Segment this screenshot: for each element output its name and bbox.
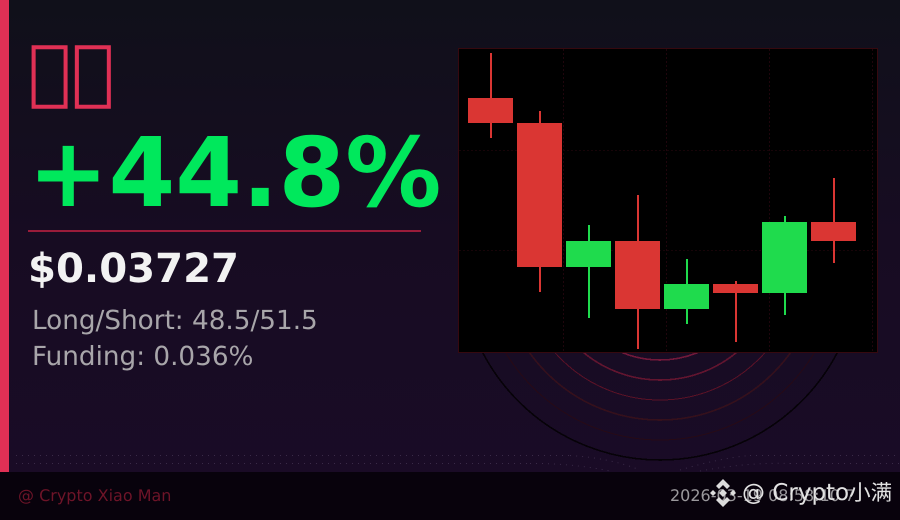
icon: exchange logo xyxy=(710,479,736,507)
candle 1 xyxy=(468,53,513,138)
candle 7 xyxy=(762,216,807,315)
footer handle: @ Crypto Xiao Man xyxy=(18,486,171,505)
candle 4 xyxy=(615,195,660,349)
divider xyxy=(28,230,421,232)
candle 2 xyxy=(517,111,562,292)
watermark: @ Crypto小满 xyxy=(742,480,892,506)
accent bar xyxy=(0,0,9,472)
funding rate: Funding: 0.036% xyxy=(32,342,253,372)
long/short ratio: Long/Short: 48.5/51.5 xyxy=(32,306,318,336)
candle 8 xyxy=(811,178,856,263)
title: 􏼀􏼁 xyxy=(28,29,114,113)
footer timestamp: 2026-03-19 08:58:10 7 xyxy=(670,486,855,505)
candle 6 xyxy=(713,281,758,342)
candlestick chart xyxy=(458,48,878,353)
price: $0.03727 xyxy=(28,246,239,292)
candle 5 xyxy=(664,259,709,324)
percentage change: +44.8% xyxy=(28,117,441,229)
candle 3 xyxy=(566,225,611,318)
footer bar xyxy=(0,472,900,520)
